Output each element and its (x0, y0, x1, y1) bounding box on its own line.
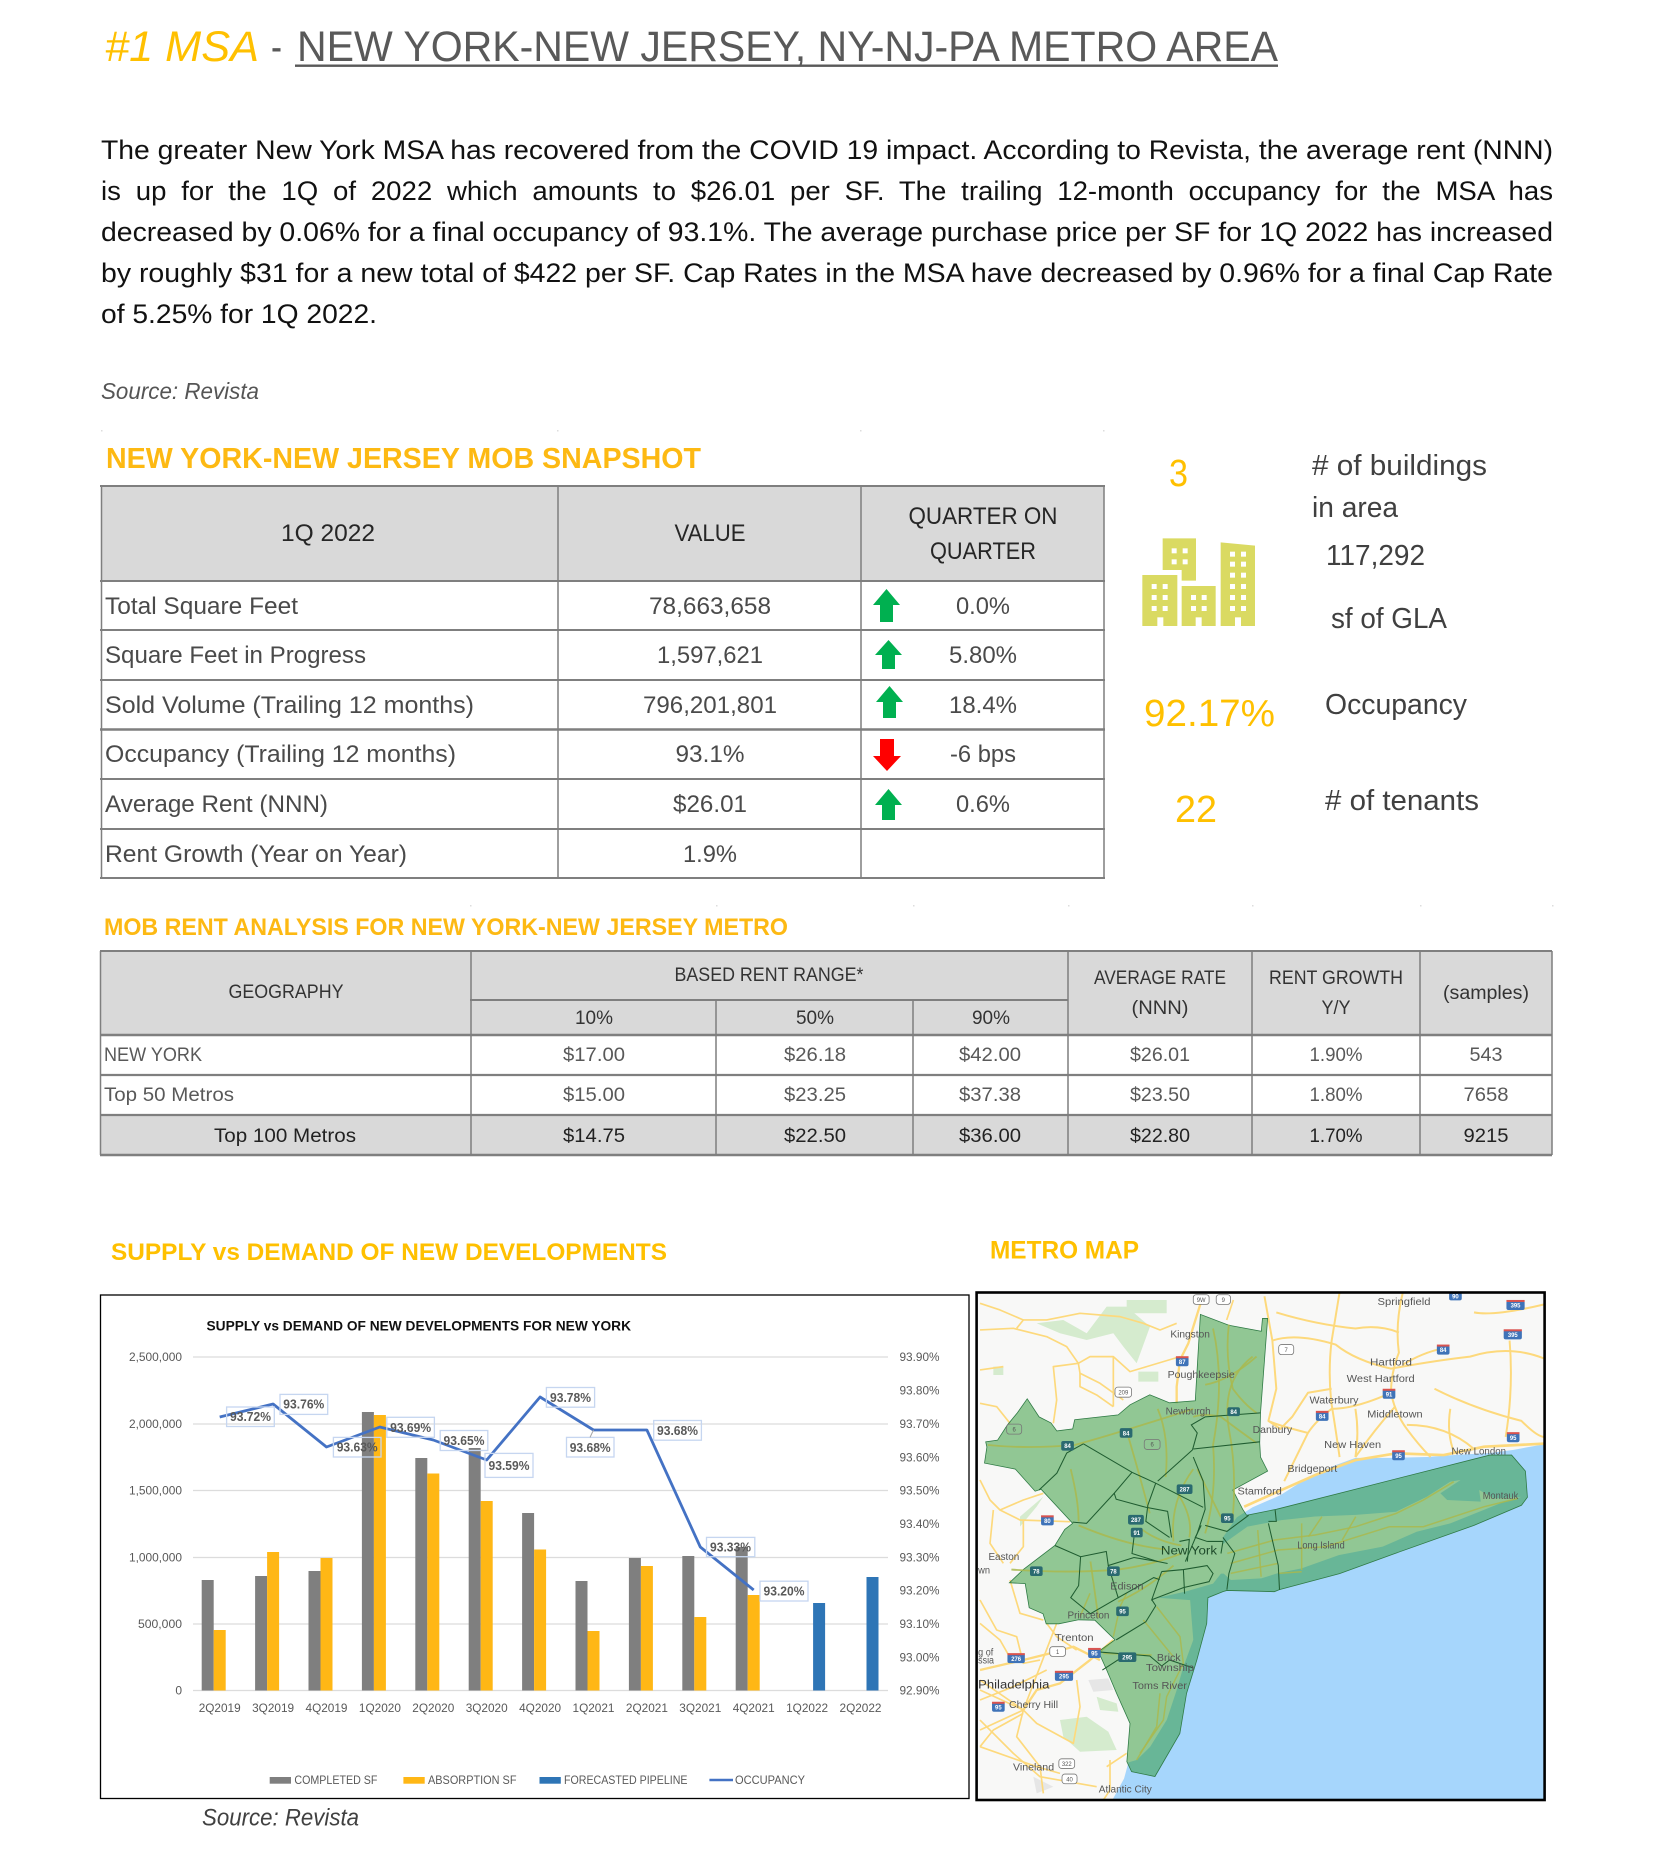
map place labels: New York (1161, 1543, 1217, 1557)
occupancy data labels: 93.76% (283, 1398, 324, 1412)
intro paragraph: of 5.25% for 1Q 2022. (101, 299, 377, 329)
roads (980, 1292, 1550, 1800)
intro paragraph: is up for the 1Q of 2022 which amounts to $26.01 per SF. The trailing 12-month occupancy for the MSA has (101, 176, 1553, 206)
row: square feet in progress (105, 640, 1017, 669)
map place labels: g of (978, 1647, 993, 1659)
row: Top 100 Metros: $14.75 (563, 1126, 625, 1147)
map shields: 84 (1123, 1431, 1130, 1437)
map shields: 287 (1180, 1488, 1190, 1494)
map shields: 84 (1230, 1410, 1238, 1416)
stat: occupancy: Occupancy (1325, 689, 1468, 721)
row: Top 50 Metros: 1.80% (1310, 1085, 1363, 1106)
occupancy data labels: 93.63% (337, 1440, 378, 1454)
rent table header: (samples) (1443, 983, 1529, 1004)
rent table header: 90% (972, 1008, 1010, 1029)
map shields: 295 (1059, 1674, 1070, 1680)
right axis labels: 93.50% (900, 1484, 940, 1498)
chart source note: Source: Revista (202, 1804, 359, 1832)
map place labels: Newburgh (1166, 1406, 1211, 1417)
heading: rent analysis: MOB RENT ANALYSIS FOR NEW YORK-NEW JERSEY METRO (104, 914, 788, 941)
row: occupancy: 93.1% (676, 741, 744, 768)
chart: supply vs demand (100, 1295, 969, 1798)
row: Top 50 Metros (104, 1085, 1508, 1106)
title: NEW YORK-NEW JERSEY, NY-NJ-PA METRO AREA (297, 23, 1278, 71)
map shields: 287 (1131, 1518, 1142, 1524)
rent table header: (NNN) (1132, 998, 1188, 1019)
map shields: 84 (1440, 1348, 1447, 1354)
stat: buildings: in area (1312, 492, 1398, 524)
right axis labels: 93.20% (900, 1584, 940, 1598)
map place labels: Toms River (1132, 1681, 1188, 1692)
rent table header: 10% (575, 1008, 613, 1029)
row: Top 50 Metros: $23.25 (784, 1085, 846, 1106)
category labels: 3Q2019 (252, 1701, 294, 1715)
map place labels: Vineland (1013, 1762, 1054, 1773)
map shields: 6 (1151, 1443, 1154, 1449)
stat: gross leasable area (1326, 540, 1447, 635)
category labels: 2Q2022 (840, 1701, 882, 1715)
chart legend: OCCUPANCY (735, 1773, 805, 1787)
rent table header: AVERAGE RATE (1094, 968, 1226, 989)
row: Top 50 Metros: $15.00 (563, 1085, 625, 1106)
stat: buildings: 3 (1169, 453, 1188, 495)
map shields: 87 (1179, 1360, 1186, 1366)
category labels: 3Q2021 (679, 1701, 722, 1715)
map shields: 91 (1133, 1531, 1141, 1537)
map shields: 1 (1056, 1650, 1060, 1656)
row: New York: $26.01 (1130, 1045, 1190, 1066)
row: Top 50 Metros: Top 50 Metros (104, 1085, 234, 1106)
intro paragraph (101, 135, 1553, 329)
category labels: 4Q2020 (519, 1701, 561, 1715)
row: Top 50 Metros: 7658 (1464, 1085, 1508, 1106)
row: rent growth (105, 841, 737, 868)
right axis labels: 92.90% (900, 1684, 940, 1698)
right axis labels: 93.40% (900, 1517, 940, 1531)
title: - (271, 23, 282, 71)
right axis labels: 93.90% (900, 1350, 940, 1364)
snapshot table header: QUARTER ON (908, 503, 1058, 530)
rent table header (228, 965, 1529, 1029)
map shields: 276 (1011, 1657, 1022, 1663)
row: New York: 543 (1470, 1045, 1502, 1066)
row: square feet in progress: 5.80% (949, 642, 1017, 669)
chart legend: FORECASTED PIPELINE (564, 1773, 688, 1787)
snapshot table header: 1Q 2022 (281, 520, 375, 547)
map shields: 95 (1091, 1652, 1098, 1658)
map place labels: Long Island (1297, 1541, 1345, 1552)
rent table header: RENT GROWTH (1269, 968, 1403, 989)
snapshot table header: VALUE (674, 520, 746, 547)
row: rent growth: 1.9% (683, 841, 737, 868)
source note: Source: Revista (101, 378, 259, 404)
left axis labels: 2,000,000 (129, 1417, 182, 1431)
row: occupancy: -6 bps (950, 741, 1016, 768)
left axis labels: 500,000 (138, 1617, 182, 1631)
map place labels: West Hartford (1347, 1374, 1415, 1385)
metro map (977, 1292, 1550, 1800)
map place labels: New London (1451, 1447, 1506, 1458)
map shields: 395 (1508, 1333, 1518, 1339)
left axis labels: 1,000,000 (129, 1550, 182, 1564)
map place labels: Atlantic City (1099, 1785, 1152, 1796)
row: sold volume (105, 686, 1017, 719)
heading: metro map: METRO MAP (990, 1236, 1139, 1264)
map place labels: Cherry Hill (1009, 1700, 1058, 1711)
row: Top 100 Metros: $22.50 (784, 1126, 846, 1147)
map shields: 209 (1118, 1390, 1129, 1396)
map shields: 295 (1122, 1656, 1133, 1662)
row: total square feet: 78,663,658 (649, 593, 771, 620)
row: New York: 1.90% (1310, 1045, 1363, 1066)
parks and urban south-west (1033, 1678, 1118, 1793)
row: Top 50 Metros: $23.50 (1130, 1085, 1190, 1106)
map shields: 90 (1452, 1295, 1459, 1301)
row: square feet in progress: 1,597,621 (657, 642, 763, 669)
snapshot table header (101, 486, 1104, 581)
occupancy line (220, 1397, 754, 1590)
category labels: 4Q2021 (733, 1701, 775, 1715)
occupancy data labels: 93.20% (764, 1584, 804, 1598)
left axis labels: 1,500,000 (129, 1484, 182, 1498)
map shields: 78 (1110, 1570, 1117, 1576)
stat: occupancy: 92.17% (1144, 693, 1275, 735)
occupancy data labels (227, 1388, 808, 1601)
map shields: 84 (1319, 1414, 1326, 1421)
map place labels: Montauk (1483, 1491, 1518, 1502)
map shields: 95 (1395, 1454, 1402, 1460)
metro area counties overlay (985, 1314, 1527, 1776)
occupancy data labels: 93.78% (550, 1391, 591, 1405)
map shields: 95 (1119, 1610, 1126, 1616)
category labels: 2Q2019 (199, 1701, 241, 1715)
row: Top 50 Metros: $37.38 (959, 1085, 1021, 1106)
chart legend (270, 1773, 805, 1787)
occupancy data labels: 93.33% (710, 1540, 751, 1554)
intro paragraph: decreased by 0.06% for a final occupancy of 93.1%. The average purchase price per SF for 1Q 2022 has increased (101, 217, 1553, 247)
rent table header: GEOGRAPHY (228, 982, 344, 1003)
map place labels: Middletown (1367, 1410, 1423, 1421)
category labels: 2Q2021 (626, 1701, 668, 1715)
map shields: 95 (1224, 1517, 1231, 1523)
row: sold volume: 18.4% (949, 692, 1017, 719)
row: average rent: 0.6% (956, 791, 1010, 818)
map place labels: Kingston (1170, 1330, 1210, 1341)
bars: absorption SF (214, 1415, 760, 1690)
row: Top 100 Metros: $22.80 (1130, 1126, 1190, 1147)
row: Top 100 Metros: Top 100 Metros (214, 1126, 356, 1147)
map shields: 95 (1510, 1436, 1517, 1442)
bars: completed SF (202, 1412, 748, 1690)
map shields: 7 (1285, 1348, 1289, 1354)
row: average rent (105, 789, 1010, 820)
map place labels (977, 1297, 1518, 1796)
right axis labels: 93.10% (900, 1617, 940, 1631)
row: Top 100 Metros: 9215 (1464, 1126, 1508, 1147)
category labels: 4Q2019 (306, 1701, 348, 1715)
row: New York: $17.00 (563, 1045, 625, 1066)
map place labels: Princeton (1068, 1611, 1109, 1622)
category labels: 1Q2022 (786, 1701, 828, 1715)
bars: forecasted pipeline (813, 1577, 878, 1690)
row: total square feet: 0.0% (956, 593, 1010, 620)
map place labels: ssia (978, 1656, 994, 1667)
row: average rent: $26.01 (673, 791, 747, 818)
row: rent growth: Rent Growth (Year on Year) (105, 841, 407, 868)
icon: buildings (1142, 538, 1255, 626)
map place labels: New Haven (1324, 1440, 1381, 1451)
row: New York: NEW YORK (104, 1045, 202, 1066)
occupancy data labels: 93.72% (230, 1410, 271, 1424)
row: New York: $26.18 (784, 1045, 846, 1066)
map shields: 78 (1033, 1570, 1040, 1576)
row: Top 100 Metros: $36.00 (959, 1126, 1021, 1147)
category labels (199, 1701, 882, 1715)
map shields: 91 (1386, 1392, 1393, 1398)
right axis labels (900, 1350, 940, 1698)
map place labels: Brick (1157, 1653, 1181, 1664)
map place labels: Philadelphia (978, 1677, 1050, 1692)
map shields: 84 (1064, 1444, 1072, 1450)
row: total square feet (105, 589, 1010, 622)
map shields: 95 (995, 1705, 1002, 1711)
row: sold volume: Sold Volume (Trailing 12 months) (105, 692, 474, 719)
chart title: SUPPLY vs DEMAND OF NEW DEVELOPMENTS FOR NEW YORK (206, 1318, 631, 1334)
map place labels: Edison (1110, 1582, 1143, 1593)
stat: tenants: 22 (1175, 789, 1217, 831)
intro paragraph: by roughly $31 for a new total of $422 per SF. Cap Rates in the MSA have decreased by 0.96% for a final Cap Rate (101, 258, 1553, 288)
left axis labels (129, 1350, 182, 1698)
row: sold volume: 796,201,801 (643, 692, 777, 719)
map place labels: Springfield (1378, 1297, 1431, 1308)
title: #1 MSA (105, 23, 259, 71)
left axis labels: 0 (175, 1684, 182, 1698)
stat: tenants: # of tenants (1325, 785, 1479, 817)
row: occupancy (105, 739, 1016, 771)
stat: tenants (1175, 785, 1479, 831)
snapshot table (100, 486, 1105, 878)
intro paragraph: The greater New York MSA has recovered from the COVID 19 impact. According to Revista, the average rent (NNN) (101, 135, 1553, 165)
occupancy data labels: 93.68% (570, 1441, 611, 1455)
rent table header: 50% (796, 1008, 834, 1029)
chart legend: ABSORPTION SF (428, 1773, 516, 1787)
map shields: 80 (1044, 1519, 1051, 1525)
map place labels: Trenton (1055, 1633, 1094, 1644)
row: New York (104, 1045, 1502, 1066)
heading: supply vs demand: SUPPLY vs DEMAND OF NEW DEVELOPMENTS (111, 1239, 667, 1266)
map shields (992, 1292, 1525, 1784)
map place labels: Easton (988, 1552, 1019, 1563)
stat: gross leasable area: sf of GLA (1331, 603, 1447, 635)
category labels: 3Q2020 (466, 1701, 508, 1715)
map shields: 6 (1013, 1427, 1016, 1433)
map shields: 395 (1511, 1304, 1521, 1310)
rent analysis table (100, 951, 1552, 1155)
map shields: 9 (1222, 1298, 1226, 1304)
occupancy data labels: 93.65% (444, 1434, 484, 1448)
map place labels: Stamford (1238, 1486, 1282, 1497)
left axis labels: 2,500,000 (129, 1350, 182, 1364)
snapshot table header: QUARTER (930, 538, 1036, 565)
heading: snapshot: NEW YORK-NEW JERSEY MOB SNAPSHOT (106, 443, 701, 475)
stat: occupancy (1144, 689, 1468, 735)
category labels: 2Q2020 (412, 1701, 455, 1715)
row: New York: $42.00 (959, 1045, 1021, 1066)
category labels: 1Q2021 (572, 1701, 615, 1715)
stat: buildings (1169, 450, 1487, 524)
stat: gross leasable area: 117,292 (1326, 540, 1425, 572)
right axis labels: 93.60% (900, 1450, 940, 1464)
stat: buildings: # of buildings (1312, 450, 1487, 482)
row: Top 100 Metros (214, 1126, 1508, 1147)
row: total square feet: Total Square Feet (105, 593, 298, 620)
map place labels: Bridgeport (1287, 1464, 1337, 1475)
map place labels: Waterbury (1310, 1396, 1359, 1407)
row: occupancy: Occupancy (Trailing 12 months) (105, 741, 456, 768)
rent table header: BASED RENT RANGE* (674, 965, 864, 986)
right axis labels: 93.80% (900, 1384, 940, 1398)
row: average rent: Average Rent (NNN) (105, 791, 328, 818)
chart legend: COMPLETED SF (294, 1773, 377, 1787)
map shields: 40 (1066, 1777, 1073, 1783)
category labels: 1Q2020 (359, 1701, 401, 1715)
rent table header: Y/Y (1322, 998, 1351, 1019)
right axis labels: 93.00% (900, 1650, 940, 1664)
occupancy data labels: 93.59% (488, 1459, 530, 1473)
map place labels: Poughkeepsie (1168, 1370, 1235, 1381)
row: square feet in progress: Square Feet in Progress (105, 642, 366, 669)
map shields: 9W (1197, 1298, 1206, 1304)
parks north-west (993, 1300, 1167, 1527)
right axis labels: 93.30% (900, 1550, 940, 1564)
occupancy data labels: 93.68% (657, 1424, 698, 1438)
map place labels: Township (1146, 1663, 1195, 1674)
row: Top 100 Metros: 1.70% (1310, 1126, 1363, 1147)
map place labels: wn (977, 1566, 990, 1577)
map shields: 322 (1062, 1762, 1072, 1768)
right axis labels: 93.70% (900, 1417, 940, 1431)
occupancy data labels: 93.69% (390, 1421, 431, 1435)
map place labels: Danbury (1253, 1425, 1292, 1436)
map place labels: Hartford (1370, 1357, 1412, 1368)
side stats (1142, 450, 1487, 831)
